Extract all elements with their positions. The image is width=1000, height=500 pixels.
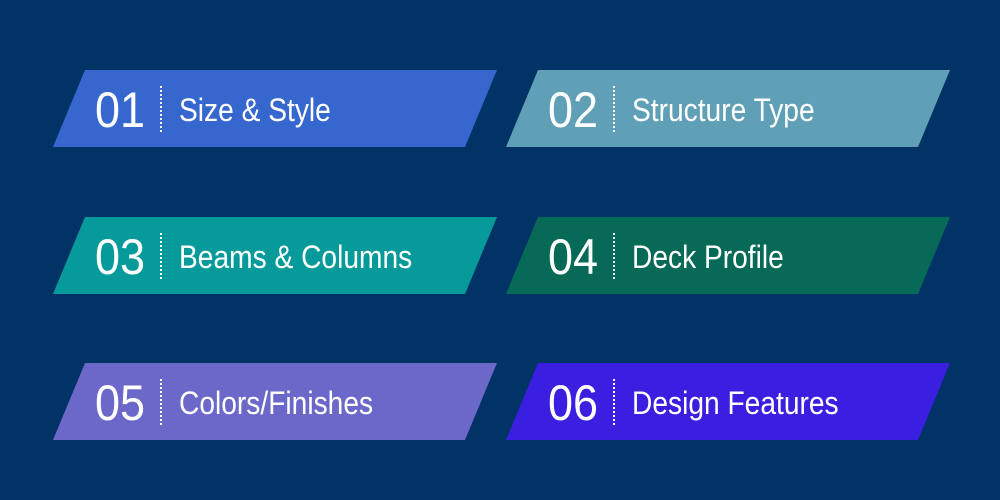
number 06: 06: [548, 375, 598, 431]
banner 05: [53, 363, 497, 440]
number 02: 02: [548, 82, 598, 138]
label: Structure Type: [632, 92, 815, 128]
number 03: 03: [95, 229, 145, 285]
banner 04: [506, 217, 950, 294]
number 04: 04: [548, 229, 598, 285]
label: Deck Profile: [632, 239, 784, 275]
number 05: 05: [95, 375, 145, 431]
label: Colors/Finishes: [179, 385, 373, 421]
banner 06: [506, 363, 950, 440]
banner 01: [53, 70, 497, 147]
number 01: 01: [95, 82, 145, 138]
label: Beams & Columns: [179, 239, 412, 275]
banner 02: [506, 70, 950, 147]
label: Size & Style: [179, 92, 331, 128]
banner 03: [53, 217, 497, 294]
label: Design Features: [632, 385, 839, 421]
